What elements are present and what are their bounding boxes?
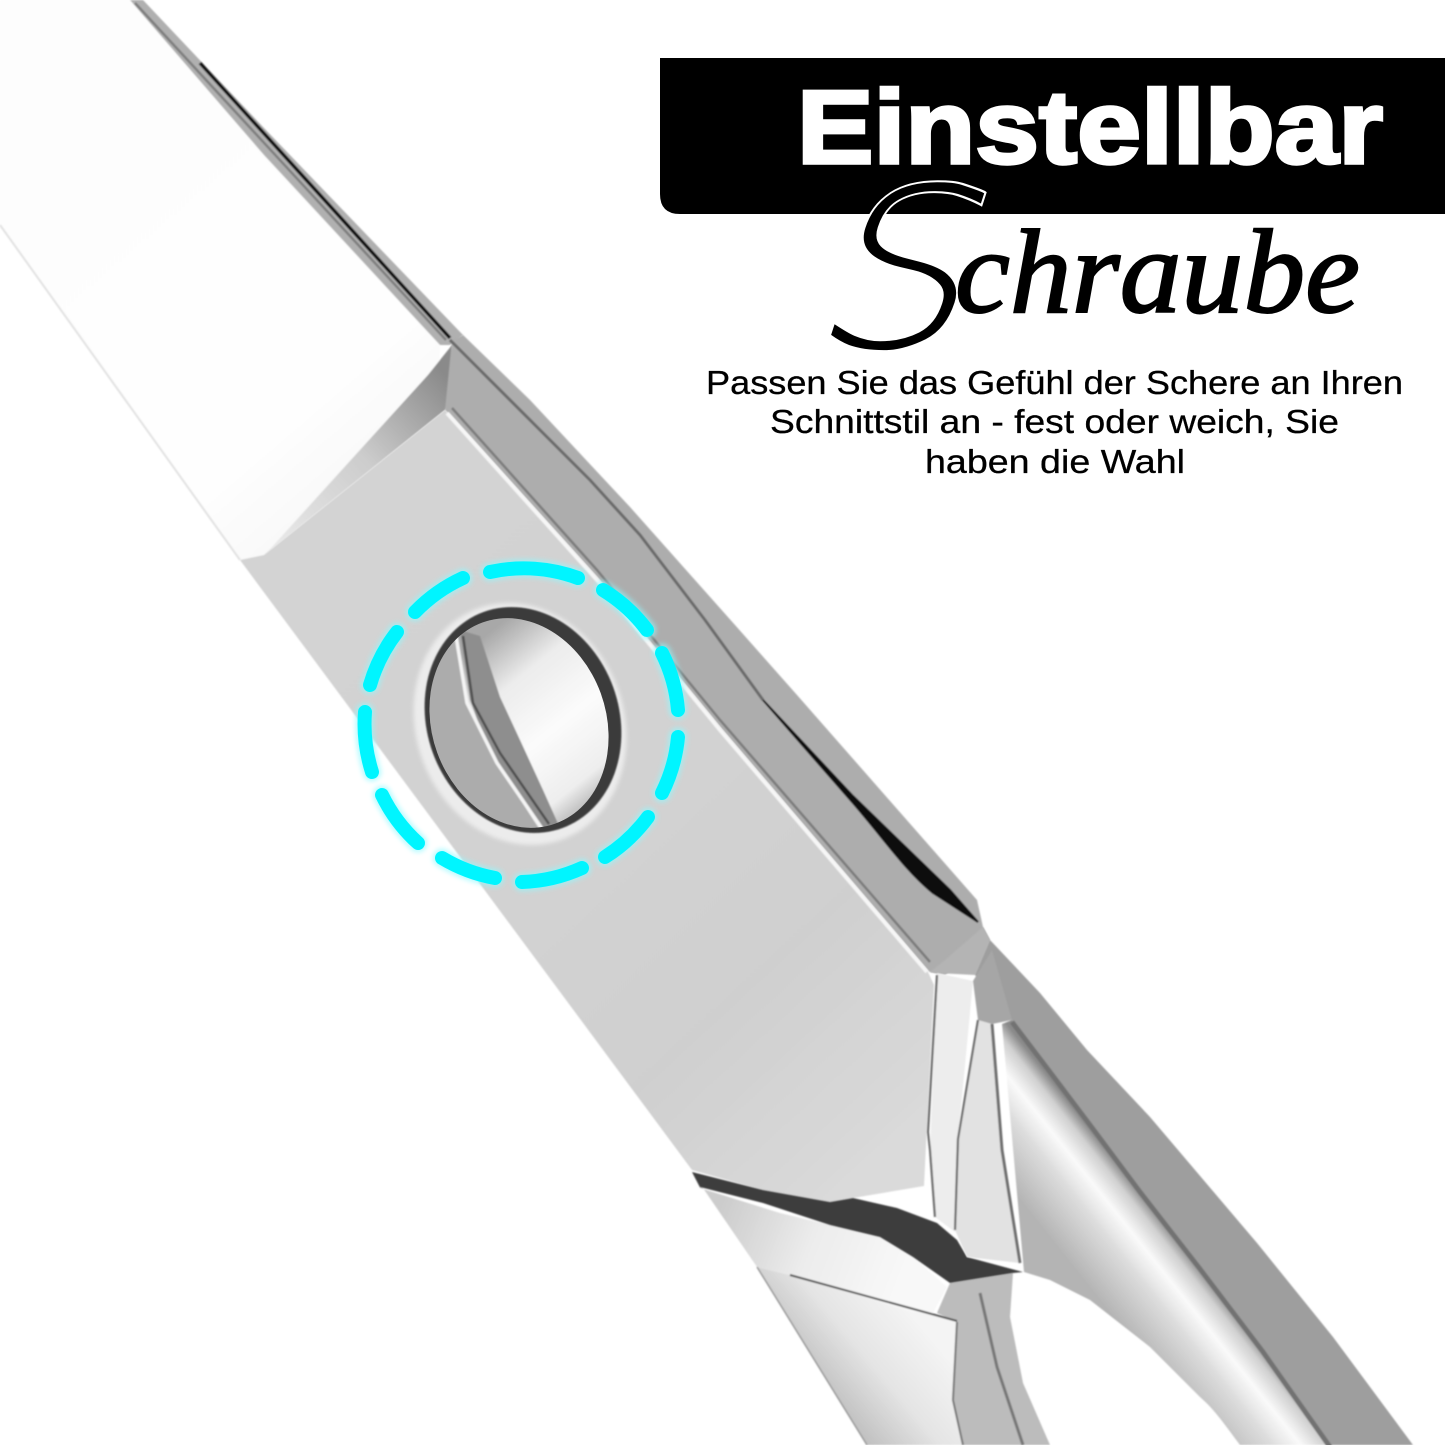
description text: Passen Sie das Gefühl der Schere an Ihren	[706, 364, 1403, 401]
script subheading: Schraube	[788, 141, 1360, 400]
description text	[706, 364, 1403, 480]
outer metal edge band	[445, 335, 990, 975]
script lowercase letters: chraube	[955, 205, 1360, 338]
upper blade	[0, 0, 463, 560]
cyan dashed highlight ring	[365, 568, 678, 882]
script capital S: S	[788, 141, 1027, 400]
screw head	[412, 602, 628, 846]
lower handle neck and blade	[692, 1172, 1050, 1445]
dark gap between the blades	[692, 1172, 1023, 1283]
panel highlight edge	[447, 413, 927, 972]
description text: Schnittstil an - fest oder weich, Sie	[770, 403, 1339, 440]
upper handle	[928, 927, 1413, 1445]
heading bar	[660, 58, 1445, 214]
flat pivot panel	[240, 410, 934, 1202]
heading: Einstellbar: Einstellbar	[797, 70, 1383, 186]
description text: haben die Wahl	[925, 443, 1185, 480]
ring glow	[365, 568, 678, 882]
ring dashes	[365, 568, 678, 882]
